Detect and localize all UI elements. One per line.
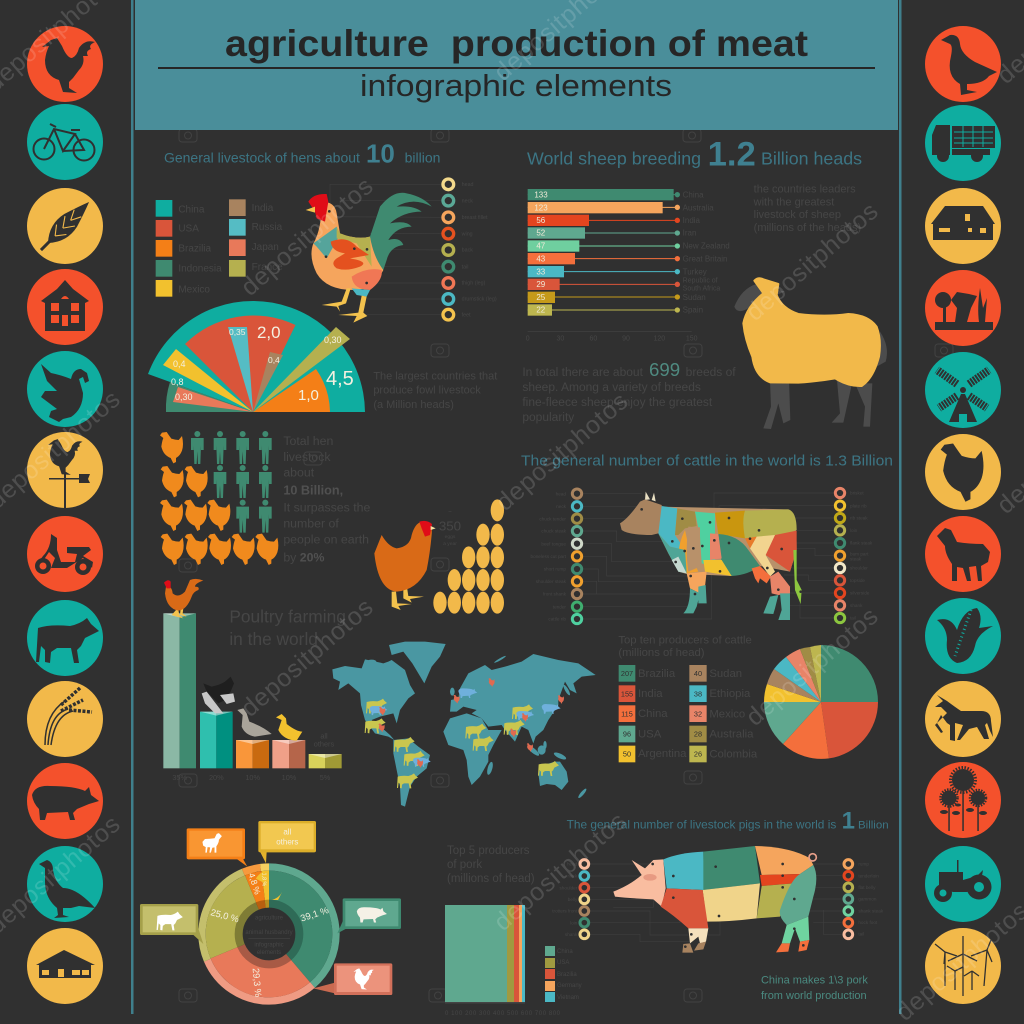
bar chart: sheep countries: India (683, 216, 701, 225)
heading: sheep: 1.2 (708, 135, 756, 173)
cow part labels: right: steak (850, 557, 862, 562)
cow part labels: left: beef tongue (541, 541, 566, 546)
bar chart: sheep countries: 43 (536, 255, 546, 264)
pig diagram (589, 846, 842, 953)
heading: sheep (527, 135, 862, 173)
legend: hen countries: France (252, 262, 283, 273)
cow part labels: right: bum part (850, 552, 869, 557)
legend: cattle countries: Sudan (709, 668, 742, 680)
cow diagram (583, 492, 833, 620)
legend: cattle countries: Australia (709, 729, 754, 741)
fan chart: largest fowl producers: 0,35 (229, 327, 246, 337)
donut centre text: agriculture (255, 915, 284, 921)
rooster part labels: thigh (leg) (462, 281, 486, 287)
heading: sheep: World sheep breeding (527, 149, 701, 169)
heading: pigs: The general number of livestock pigs in the world is (567, 817, 836, 831)
panel: livestock donut (140, 821, 401, 1001)
fan chart: largest fowl producers: 0,8 (171, 377, 183, 387)
donut percentage labels (209, 872, 330, 997)
icon: cow (27, 600, 103, 676)
cow part labels: right: flank steak (850, 541, 873, 546)
bar chart: sheep countries: 29 (536, 280, 546, 289)
map markers: cattle (365, 699, 559, 788)
heading: pigs (567, 807, 889, 834)
icon: wheat ear (11, 172, 119, 280)
icon: farm house (925, 188, 1001, 264)
icon: truck (925, 105, 1001, 181)
text: total hen livestock (283, 434, 371, 564)
text: top ten cattle: Top ten producers of cattle (618, 634, 752, 646)
legend: pork countries: Brazilia (557, 972, 577, 978)
bar chart: sheep countries: 120 (654, 336, 665, 343)
text: sheep leaders: livestock of sheep (754, 209, 841, 221)
bar chart: sheep countries: Republic of (683, 278, 718, 285)
cow part labels: left: boneless cut part (531, 554, 567, 559)
legend: pork countries: Germany (557, 983, 582, 989)
legend: cattle countries: China (638, 708, 668, 720)
pig part labels: right: shank steak (858, 908, 884, 913)
donut centre text: infographic (254, 943, 284, 949)
legend: cattle countries: 96 (623, 730, 631, 739)
bar chart: sheep countries: 47 (536, 241, 546, 250)
cow part labels: left (531, 491, 567, 622)
panel: sheep (522, 135, 887, 429)
icon: sheep (925, 516, 1001, 592)
cow part labels: right: shank (850, 603, 863, 608)
legend: pork countries: Vietnam (557, 995, 579, 1001)
text: 350 eggs a year: eggs (445, 534, 456, 540)
donut centre text (245, 915, 293, 956)
text: top 5 pork: Top 5 producers (447, 845, 530, 857)
pig part rings: left (580, 860, 589, 939)
cow part rings: left (572, 489, 582, 624)
cow part labels: left: chuck steak (541, 529, 567, 534)
header banner (135, 0, 898, 130)
bar chart: sheep countries: Australia (683, 203, 714, 212)
cow part labels: left: cattle rib (548, 617, 566, 622)
legend: cattle countries: Ethiopia (709, 688, 751, 700)
pictogram: people (191, 431, 272, 533)
pig part labels: left (552, 862, 578, 937)
fan chart: largest fowl producers (148, 301, 365, 412)
legend: cattle countries: India (638, 688, 663, 700)
icon: rooster (27, 26, 103, 102)
duck on bar (276, 714, 302, 741)
side rail lines (131, 0, 902, 1014)
bar chart: sheep countries: 90 (622, 336, 630, 343)
text: sheep breeds: fine-fleece sheep enjoy the greatest (522, 395, 713, 409)
text: top ten cattle (618, 634, 752, 659)
donut percentage labels: 39,1 % (299, 905, 330, 924)
stacked bar: pork (445, 905, 561, 1017)
fan chart: largest fowl producers: 1,0 (298, 387, 319, 404)
bar chart: sheep countries: 33 (536, 267, 546, 276)
callout: all others: others (276, 838, 298, 847)
rooster part labels: feet (462, 312, 471, 318)
3D bar chart: poultry: 10% (282, 773, 297, 782)
rooster part labels: neck (462, 198, 473, 204)
text: total hen livestock: It surpasses the (283, 501, 371, 515)
cow part labels: left: short rump (544, 567, 566, 572)
heading: hens: 10 (366, 138, 395, 168)
text: largest countries: produce fowl livestock (373, 384, 481, 396)
cow part labels: right: plate rib (850, 503, 867, 508)
bar chart: sheep countries: 60 (589, 336, 597, 343)
3D bar chart: poultry: 10% (245, 773, 260, 782)
pie chart: cattle producers (764, 645, 878, 759)
text: China pork share: from world production (761, 990, 867, 1002)
pig part labels: left: trotters front (552, 909, 578, 914)
watermarks: depositphotos (489, 807, 631, 937)
legend: hen countries: Brazilia (178, 244, 212, 255)
cow part labels: left: tender (553, 604, 566, 609)
faint stock camera marks (179, 129, 953, 1002)
bar chart: sheep countries: 52 (536, 229, 546, 238)
legend: hen countries: India (252, 203, 274, 214)
pig part labels: left: shank (565, 932, 578, 937)
legend: cattle countries: Argentina (638, 748, 687, 760)
icon: windmill (925, 352, 1001, 428)
text: total hen livestock: livestock (283, 450, 331, 464)
cow part labels: right: brisket (850, 491, 864, 496)
text: sheep breeds: sheep. Among a variety of breeds (522, 380, 701, 394)
watermarks: depositphotos (236, 172, 378, 302)
fan chart: largest fowl producers: 0,4 (268, 355, 280, 365)
donut percentage labels: 1,8 % (261, 873, 267, 887)
subtitle: infographic elements (360, 68, 672, 103)
legend: cattle countries: 155 (621, 689, 633, 698)
text: total hen livestock: 10 Billion, (283, 484, 343, 498)
panel: pigs (552, 807, 889, 1002)
icon: duck (925, 26, 1001, 102)
icon: tractor (925, 846, 1001, 922)
legend: hen countries (156, 199, 283, 297)
cow part labels: right: shoulder (850, 566, 868, 571)
left icon column (11, 26, 119, 1004)
bar chart: sheep countries: 123 (534, 203, 548, 212)
cow part labels: left: neck (556, 504, 567, 509)
text: sheep breeds: popularity (522, 410, 574, 424)
bar chart: sheep countries: 22 (536, 306, 546, 315)
pig part labels: left: loin (570, 920, 578, 925)
pictogram: hens (160, 432, 278, 565)
text: total hen livestock: number of (283, 516, 339, 530)
donut centre text: animal husbandry (245, 930, 293, 936)
heading: pigs: 1 (842, 807, 855, 834)
text: 350 eggs a year: 350 (439, 519, 461, 534)
legend: cattle countries: 38 (694, 689, 702, 698)
rooster part labels: head (462, 182, 474, 188)
rooster part labels: wing (462, 231, 473, 237)
text: total hen livestock: Total hen (283, 434, 334, 448)
icon: pig (27, 763, 103, 839)
pig part labels: left: neck (567, 874, 578, 879)
cow part labels: right: topside (850, 578, 865, 583)
icon: weather vane (27, 432, 103, 508)
legend: cattle countries: USA (638, 728, 662, 740)
icon: goose (27, 846, 103, 922)
callout: sheep (187, 828, 247, 867)
heading: hens: billion (405, 150, 440, 166)
legend: cattle countries: 32 (694, 709, 702, 718)
3D bar chart: poultry: 5% (320, 773, 331, 782)
text: total hen livestock: by 20% (283, 550, 324, 564)
cow part labels: right: loin (850, 528, 858, 533)
rooster part labels: drumstick (leg) (462, 297, 497, 303)
legend: cattle countries: Brazilia (638, 668, 676, 680)
pig part labels: right: hock foot (858, 920, 878, 925)
panel: cattle (521, 453, 893, 762)
legend: cattle countries: 28 (694, 730, 702, 739)
text: largest countries: The largest countries that (373, 370, 497, 382)
legend: cattle countries: Colombia (709, 749, 758, 761)
panel: hens (148, 138, 497, 412)
text: sheep breeds: In total there are about (522, 365, 644, 379)
watermarks: depositphotos (741, 197, 883, 327)
pig part labels: right (858, 862, 884, 937)
callout: all others: all (283, 828, 292, 837)
pig part labels: right: tenderloin (858, 873, 879, 878)
bar chart: sheep countries: 56 (536, 216, 546, 225)
watermarks: depositphotos (491, 387, 633, 517)
legend: hen countries: Mexico (178, 284, 210, 295)
rooster part labels (462, 182, 497, 318)
text: top 5 pork: (millions of head) (447, 873, 535, 885)
3D bar chart: poultry: all (320, 731, 328, 740)
bar chart: sheep countries: South Africa (683, 285, 720, 292)
text: sheep breeds: 699 (649, 359, 680, 380)
cow part labels: left: chuck tender (539, 516, 566, 521)
bar chart: sheep countries: 150 (686, 336, 698, 343)
donut percentage labels: 4,8 % (246, 872, 263, 896)
legend: cattle countries: 207 (621, 669, 633, 678)
rooster part labels: back (462, 248, 473, 254)
illustration: laying hen (374, 521, 436, 610)
callout: cow (140, 904, 203, 944)
text: 350 eggs a year: ~ (448, 509, 452, 515)
bar chart: sheep countries: 30 (556, 336, 564, 343)
legend: cattle countries: 26 (694, 750, 702, 759)
legend: pork countries: China (557, 949, 573, 955)
text: sheep breeds (522, 359, 736, 424)
goose on bar (237, 708, 272, 737)
callout: hen (313, 963, 392, 995)
panel: pork producers (445, 845, 582, 1017)
icon: sunflowers (925, 762, 1001, 838)
illustration: sheep (734, 278, 887, 429)
bar chart: sheep countries: 0 (526, 336, 530, 343)
cow part labels: right: tail (850, 616, 856, 621)
legend: pork countries: USA (557, 960, 569, 966)
bar chart: sheep countries (526, 189, 730, 343)
fan chart: largest fowl producers: 2,0 (257, 323, 281, 342)
pig part rings: right (844, 860, 853, 939)
callout: all others (258, 821, 316, 863)
icon: barn (27, 928, 103, 1004)
pig part labels: right: rump (858, 862, 869, 867)
heading: hens: General livestock of hens about (164, 150, 360, 166)
icon: turkey (27, 351, 103, 427)
legend: cattle countries (619, 665, 758, 762)
turkey on bar (202, 677, 235, 713)
fan chart: largest fowl producers: 0,30 (324, 335, 341, 345)
rooster part labels: tail (462, 264, 468, 270)
legend: hen countries: Indonesia (178, 264, 222, 275)
3D bar chart: poultry: 20% (209, 773, 224, 782)
icon: horse (925, 681, 1001, 757)
bar chart: sheep countries: Turkey (683, 267, 707, 276)
panel: hen versus people (160, 431, 504, 782)
icon: barley (27, 681, 103, 757)
text: top 5 pork: of pork (447, 859, 482, 871)
stacked bar: pork: 0 100 200 300 400 500 600 700 800 (445, 1011, 561, 1017)
legend: cattle countries: 40 (694, 669, 702, 678)
pig part labels: right: gammon (858, 897, 877, 902)
heading: sheep: Billion heads (761, 149, 862, 169)
title: agriculture production of meat (225, 23, 808, 64)
text: sheep breeds: breeds of (686, 365, 736, 379)
3D bar chart: poultry (163, 613, 342, 782)
text: top 5 pork (447, 845, 535, 885)
legend: cattle countries: 115 (621, 709, 633, 718)
icon: hen (925, 434, 1001, 510)
text: sheep leaders: (millions of the heads) (754, 222, 861, 234)
callout: pig (337, 898, 401, 933)
legend: pork countries (545, 946, 582, 1002)
text: top ten cattle: (millions of head) (618, 647, 705, 659)
pig part labels: left: head (567, 862, 578, 867)
heading: hens (164, 138, 440, 168)
bar chart: sheep countries: New Zealand (683, 241, 730, 250)
map markers: pigs (370, 688, 561, 767)
pig part labels: right: tail (858, 932, 864, 937)
legend: cattle countries: 50 (623, 750, 631, 759)
watermarks: depositphotos (741, 602, 883, 732)
bar chart: sheep countries: 25 (536, 293, 546, 302)
bar chart: sheep countries: China (683, 191, 704, 200)
icon: house (27, 269, 103, 345)
bar chart: sheep countries: 133 (534, 191, 548, 200)
heading: pigs: Billion (858, 819, 889, 831)
eggs pyramid (433, 499, 504, 614)
heading: cattle: The general number of cattle in the world is 1.3 Billion (521, 453, 893, 469)
bar chart: sheep countries: Spain (683, 306, 703, 315)
fan chart: largest fowl producers: 0,30 (175, 392, 192, 402)
map markers: hens (378, 678, 564, 768)
cow part labels: right: rib steak (850, 516, 868, 521)
3D bar chart: poultry: others (314, 740, 335, 749)
cow part labels: right (850, 491, 873, 621)
heading: poultry farming (229, 607, 346, 649)
rooster diagram (306, 184, 442, 323)
legend: hen countries: China (178, 205, 205, 216)
cow part labels: left: front shank (543, 592, 567, 597)
fan chart: largest fowl producers: 0,4 (173, 359, 185, 369)
icon: corn (925, 598, 1001, 674)
heading: poultry farming: in the world (229, 629, 318, 649)
text: sheep leaders: with the greatest (753, 196, 834, 208)
rooster on bar (164, 579, 203, 618)
icon: bicycle (27, 104, 103, 180)
legend: hen countries: Japan (252, 242, 279, 253)
cow part labels: right: silverside (850, 591, 870, 596)
text: total hen livestock: about (283, 466, 315, 480)
fan chart: largest fowl producers: 4,5 (326, 368, 354, 390)
bar chart: sheep countries: Iran (683, 229, 696, 238)
text: 350 eggs a year: a year (443, 541, 457, 547)
text: China pork share: China makes 1\3 pork (761, 975, 868, 987)
donut percentage labels: 25,0 % (209, 907, 240, 924)
donut chart (202, 867, 336, 1001)
legend: hen countries: USA (178, 224, 199, 235)
legend: cattle countries: Mexico (709, 708, 745, 720)
text: total hen livestock: people on earth (283, 532, 369, 546)
text: largest countries: (a Million heads) (373, 399, 454, 411)
text: sheep leaders (753, 183, 861, 234)
icon: plants (925, 270, 1001, 346)
text: largest countries (373, 370, 497, 411)
text: sheep leaders: the countries leaders (754, 183, 856, 195)
legend: hen countries: Russia (252, 222, 283, 233)
text: 350 eggs a year (439, 509, 461, 547)
icon: wind turbines (925, 928, 1001, 1004)
heading: poultry farming: Poultry farming (229, 607, 346, 627)
watermarks: depositphotos (236, 593, 378, 723)
3D bar chart: poultry: 35% (172, 773, 187, 782)
donut centre text: elements (257, 950, 281, 956)
cow part rings: right (835, 488, 845, 623)
header rule (158, 67, 875, 69)
cow part labels: left: shoulder steak (536, 579, 567, 584)
bar chart: sheep countries: Sudan (683, 293, 706, 302)
pig part labels: right: flat belly (858, 885, 876, 890)
rooster part labels: breast fillet (462, 215, 488, 221)
rooster part rings (443, 179, 454, 320)
cow part labels: left: head (556, 491, 566, 496)
icon: scooter (27, 516, 103, 592)
pig part labels: left: shoulder (559, 885, 578, 890)
pig part labels: left: belly (568, 897, 578, 902)
world map (332, 642, 596, 807)
right icon column (925, 26, 1001, 1004)
bar chart: sheep countries: Great Britain (683, 255, 727, 264)
text: China pork share (761, 975, 868, 1002)
donut percentage labels: 29,3 % (251, 968, 263, 997)
